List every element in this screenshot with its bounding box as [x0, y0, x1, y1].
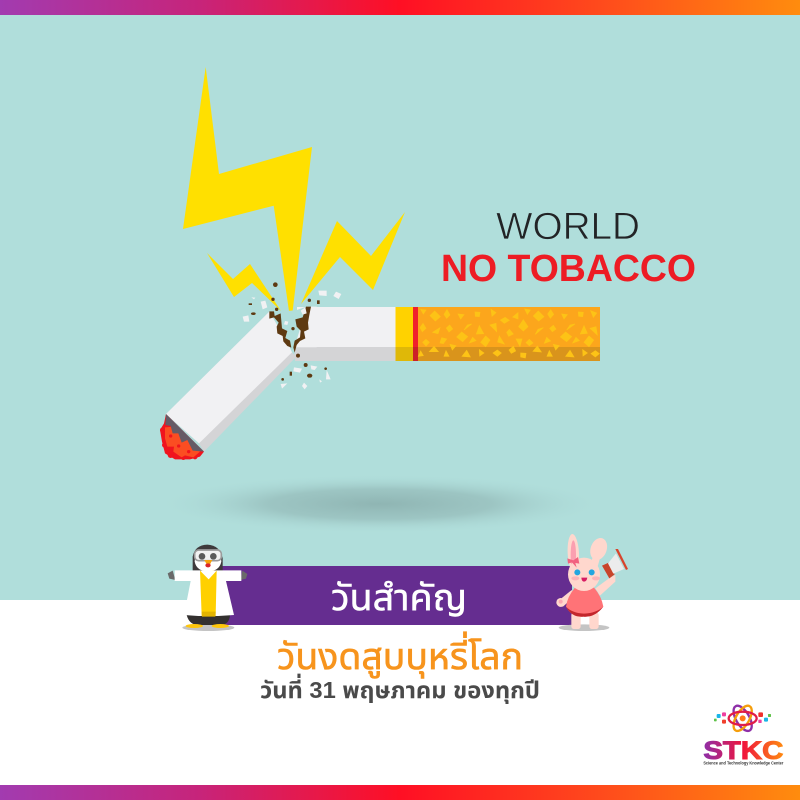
- subheading: Thai date: วันที่ 31 พฤษภาคม ของทุกปี: [260, 673, 540, 704]
- bottom gradient bar: [0, 785, 800, 800]
- banner text: วันสำคัญ: [331, 577, 467, 618]
- icon: lightning bolts: [183, 67, 405, 325]
- banner: purple: [220, 566, 572, 625]
- heading: WORLD: WORLD: [496, 206, 640, 248]
- top gradient bar: [0, 0, 800, 15]
- mascot: pink rabbit with megaphone: [556, 534, 628, 631]
- background: teal panel: [0, 0, 800, 600]
- cigarette shadow: [155, 474, 605, 534]
- icon: cigarette right section: [295, 307, 600, 361]
- mascot: penguin in lab coat: [168, 545, 247, 631]
- ash tip: [165, 414, 204, 452]
- logo: STKC: [703, 703, 783, 766]
- heading: NO TOBACCO: NO TOBACCO: [441, 248, 696, 290]
- logo: STKC: STKC: [703, 737, 783, 765]
- ember: [160, 414, 204, 460]
- heading: Thai title: วันงดสูบบุหรี่โลก: [277, 631, 523, 679]
- tear cut in teal: [274, 307, 307, 357]
- torn tobacco edge: [269, 311, 291, 348]
- white lower panel: [0, 600, 800, 785]
- icon: cigarette left section with burning tip: [160, 282, 341, 460]
- logo: STKC: Science and Technology Knowledge Center: [703, 761, 783, 766]
